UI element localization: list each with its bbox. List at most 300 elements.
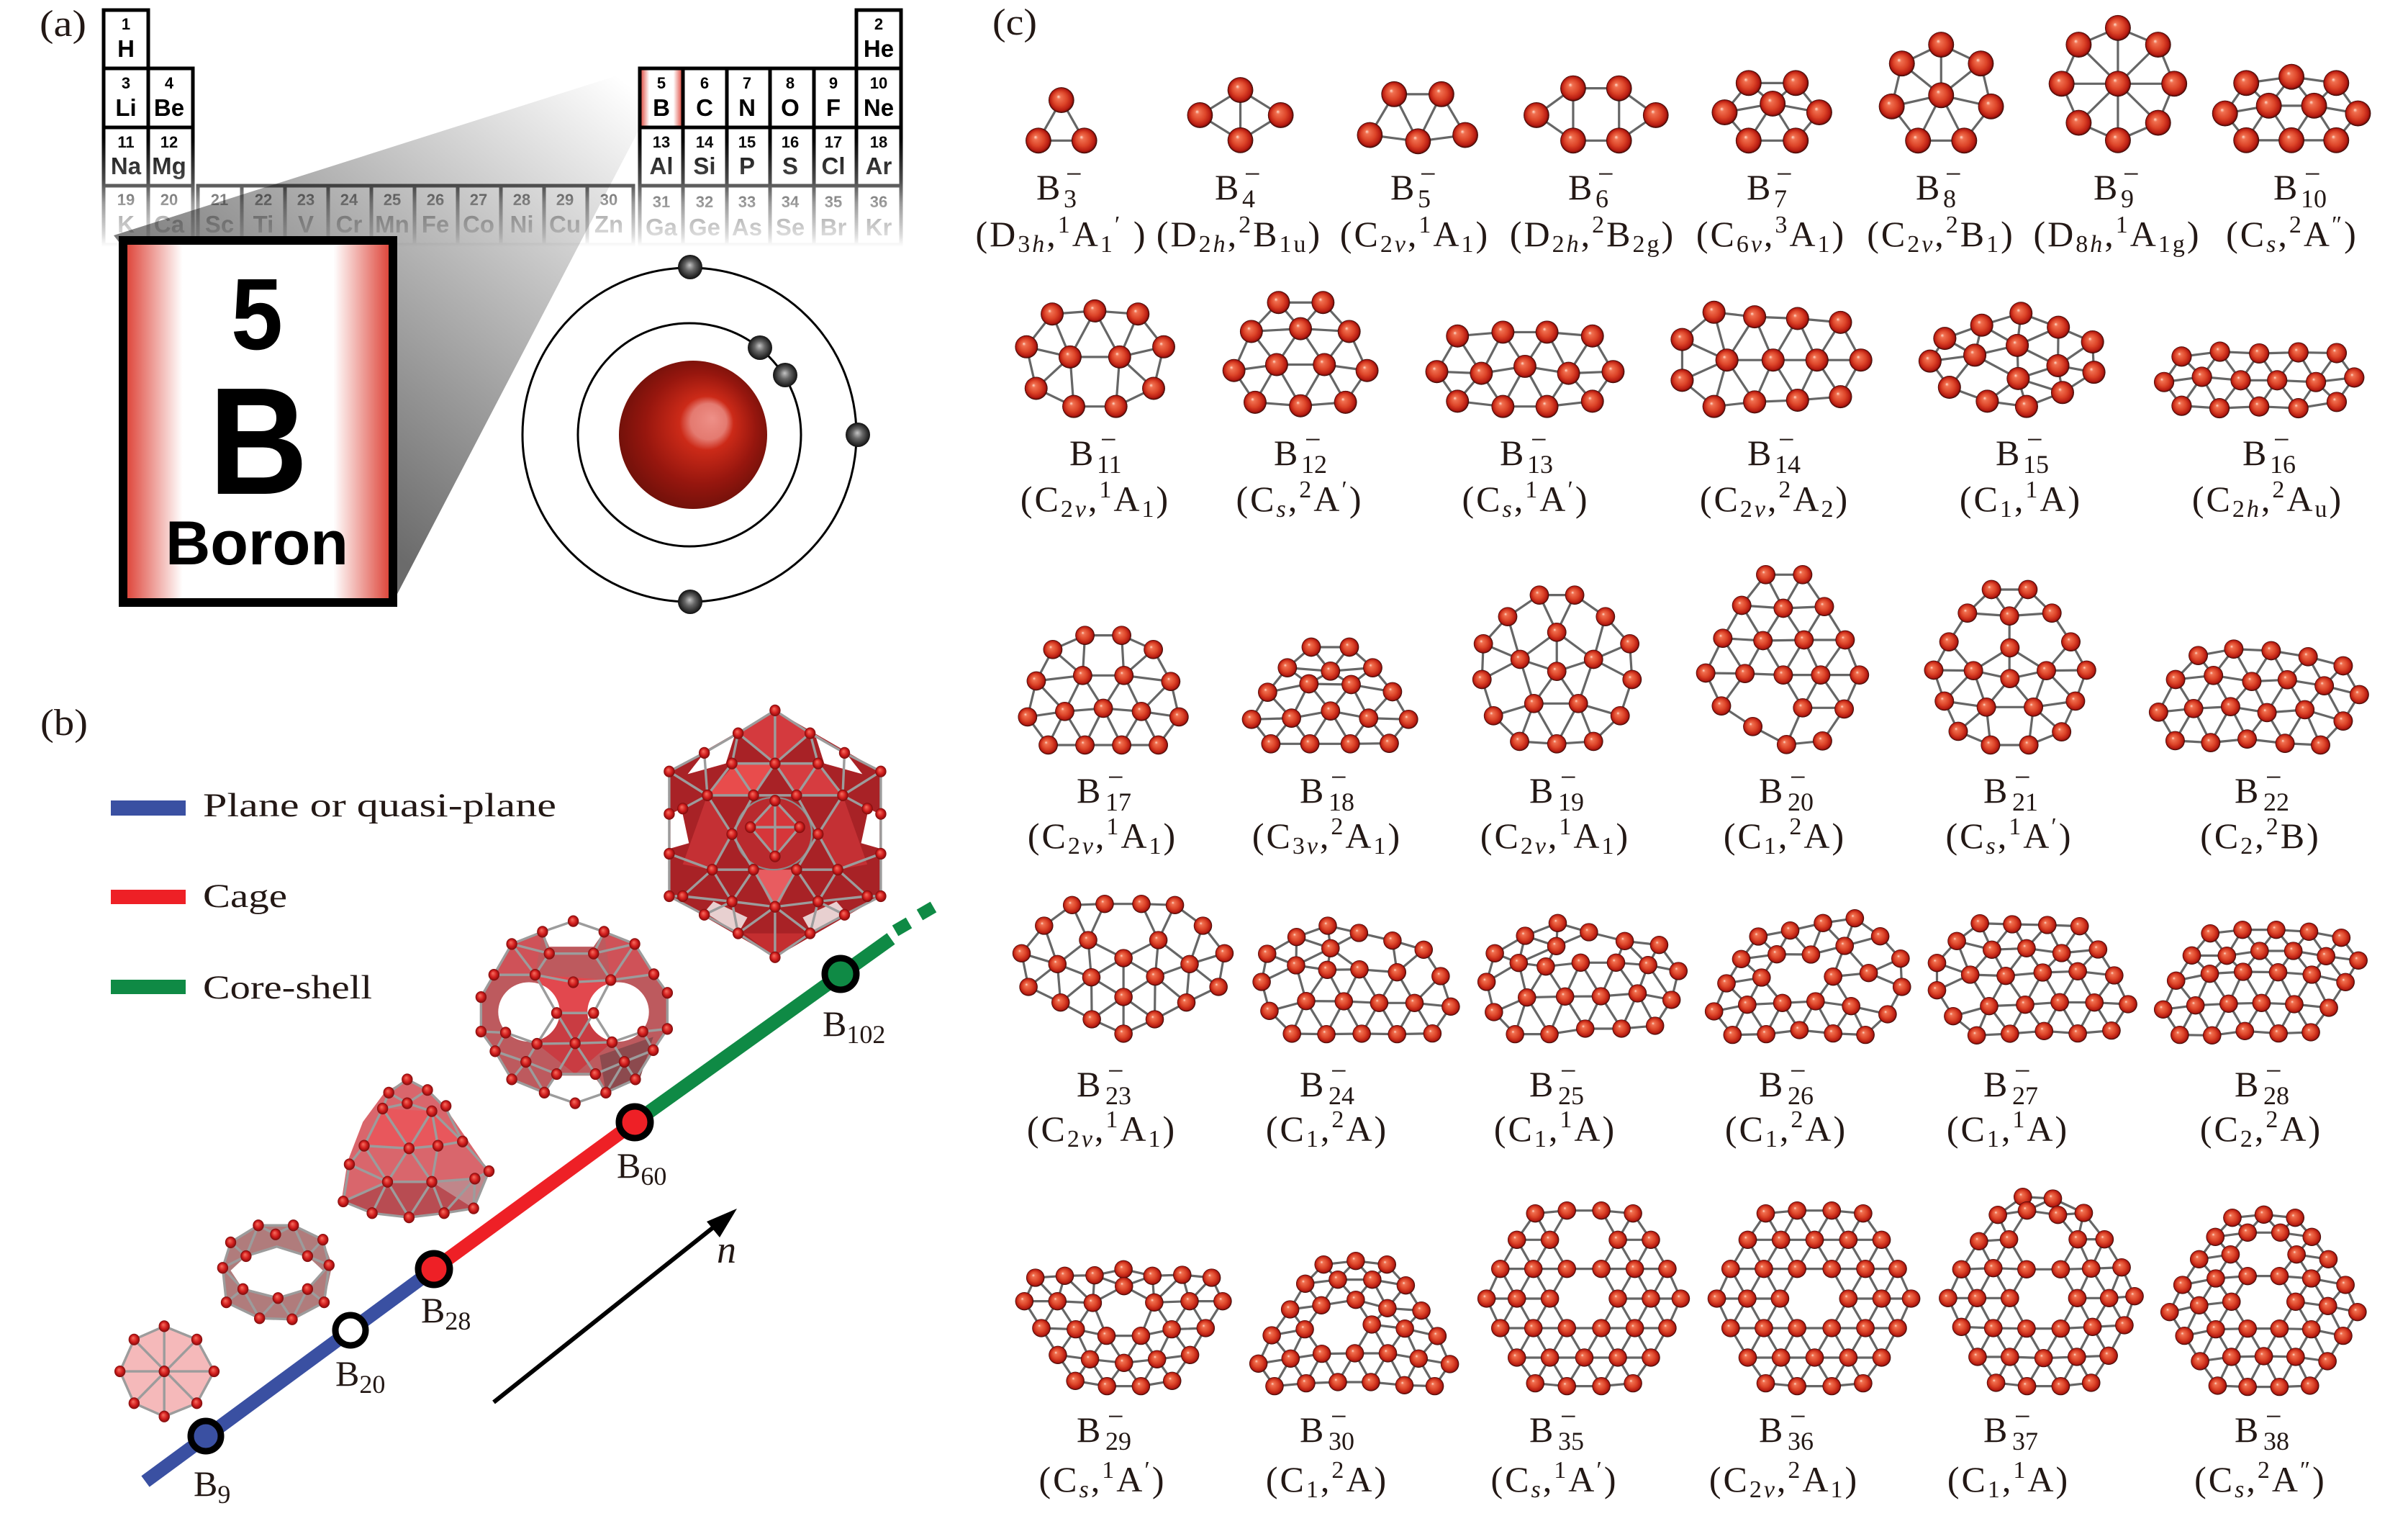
label B22: B <box>2235 770 2258 811</box>
label B25: (C1,1A) <box>1494 1106 1616 1152</box>
label B23: (C2v,1A1) <box>1027 1106 1177 1152</box>
label B16: (C2h,2Au) <box>2192 477 2343 523</box>
label B28: (C2,2A) <box>2200 1106 2322 1152</box>
label B7: − <box>1776 158 1793 190</box>
label B3: − <box>1066 158 1082 190</box>
label B37: (C1,1A) <box>1947 1457 2070 1503</box>
arrow n: n <box>717 1228 736 1271</box>
label B26: B <box>1759 1064 1783 1104</box>
boron atom model <box>522 255 870 614</box>
label B11 <box>1020 423 1170 523</box>
label B9: B <box>194 1463 217 1504</box>
cluster B24 <box>1262 926 1451 1034</box>
cluster B4 <box>1200 90 1281 140</box>
periodic table excerpt: Sc <box>205 211 234 238</box>
panel label c: (c) <box>992 2 1037 43</box>
periodic table excerpt: 23 <box>297 191 314 209</box>
label B28: B <box>2235 1064 2258 1104</box>
periodic table excerpt: 25 <box>384 191 401 209</box>
label B28: 28 <box>445 1307 471 1335</box>
label B38: (Cs,2A″) <box>2194 1457 2327 1503</box>
label B6: B <box>1568 167 1592 207</box>
label B26 <box>1725 1055 1847 1152</box>
label B10: 10 <box>2301 184 2327 213</box>
label B4: − <box>1244 158 1261 190</box>
periodic table excerpt: 7 <box>743 74 751 92</box>
label B19 <box>1480 761 1630 859</box>
marker B20 <box>335 1315 366 1345</box>
periodic table excerpt: 28 <box>513 191 530 209</box>
label B21: (Cs,1A′) <box>1946 813 2073 859</box>
label B6: − <box>1598 158 1614 190</box>
label B29: B <box>1077 1409 1100 1450</box>
label B29: − <box>1108 1400 1124 1432</box>
cluster B27 <box>1937 924 2128 1035</box>
label B36 <box>1709 1400 1859 1503</box>
periodic table excerpt: Ne <box>864 94 894 121</box>
label B30: B <box>1300 1409 1323 1450</box>
label B27: (C1,1A) <box>1947 1106 2069 1152</box>
periodic table excerpt: Cl <box>822 153 845 179</box>
label B4: B <box>1215 167 1239 207</box>
periodic table excerpt: 36 <box>870 193 887 211</box>
label B13: 13 <box>1527 450 1553 479</box>
label B5 <box>1340 158 1490 258</box>
cluster B19 <box>1482 595 1632 744</box>
cluster B22 <box>2158 649 2359 745</box>
label B16: 16 <box>2270 450 2296 479</box>
structure B9 plane <box>120 1326 214 1417</box>
label B5: (C2v,1A1) <box>1340 212 1490 258</box>
label B23 <box>1027 1055 1177 1152</box>
label B27: − <box>2014 1055 2031 1087</box>
label B14: (C2v,2A2) <box>1700 477 1850 523</box>
label B6: (D2h,2B2g) <box>1510 212 1675 258</box>
periodic table excerpt: Ca <box>154 211 185 238</box>
periodic table excerpt: 1 <box>122 15 130 33</box>
periodic table excerpt: Na <box>111 153 142 179</box>
label B21 <box>1946 761 2073 859</box>
periodic table excerpt: Fe <box>422 211 449 238</box>
label B3: (D3h,1A1′ ) <box>976 212 1147 258</box>
enlarged boron element box <box>123 240 393 603</box>
periodic table excerpt: Cr <box>336 211 362 238</box>
label B22: (C2,2B) <box>2200 813 2321 859</box>
label B13: (Cs,1A′) <box>1462 477 1589 523</box>
label B20: (C1,2A) <box>1724 813 1846 859</box>
label B37: B <box>1983 1409 2007 1450</box>
periodic table excerpt: F <box>826 94 841 121</box>
periodic table excerpt: 9 <box>829 74 838 92</box>
label B10: (Cs,2A″) <box>2226 212 2358 258</box>
periodic table excerpt: H <box>117 35 135 62</box>
row 5 clusters right <box>1717 1197 2358 1387</box>
periodic table excerpt: 33 <box>738 193 756 211</box>
periodic table excerpt: 15 <box>738 133 756 151</box>
cluster labels <box>976 158 2358 1503</box>
label B28: − <box>2266 1055 2282 1087</box>
label B18: (C3v,2A1) <box>1252 813 1402 859</box>
row 1 and 2 clusters right <box>1682 28 2358 408</box>
label B12 <box>1236 423 1363 523</box>
label B9: 9 <box>217 1480 230 1509</box>
row 3 clusters left <box>1028 595 1632 745</box>
label B27 <box>1947 1055 2069 1152</box>
panel a: periodic table and boron atom <box>40 4 905 614</box>
structure cage with holes <box>481 921 667 1104</box>
label B23: B <box>1077 1064 1100 1104</box>
periodic table excerpt: Cu <box>549 211 581 238</box>
periodic table excerpt: He <box>864 35 894 62</box>
periodic table excerpt: 18 <box>870 133 887 151</box>
periodic table excerpt: Br <box>820 214 846 240</box>
label B37: 37 <box>2012 1427 2038 1456</box>
label B24 <box>1266 1055 1388 1152</box>
legend: Plane or quasi-plane <box>203 787 556 824</box>
label B36: B <box>1759 1409 1783 1450</box>
label B27: 27 <box>2012 1081 2038 1110</box>
label B29: 29 <box>1105 1427 1131 1456</box>
label B20: B <box>1759 770 1783 811</box>
label B30 <box>1266 1400 1388 1503</box>
label B9: B <box>2094 167 2117 207</box>
label B3: B <box>1036 167 1060 207</box>
label B16: B <box>2242 433 2266 473</box>
periodic table excerpt: Al <box>649 153 674 179</box>
label B18: 18 <box>1329 788 1354 816</box>
periodic table excerpt: Ti <box>253 211 273 238</box>
periodic table excerpt: 35 <box>825 193 842 211</box>
label B60: 60 <box>641 1162 666 1191</box>
label B27: B <box>1983 1064 2007 1104</box>
label B3 <box>976 158 1147 258</box>
label B13: − <box>1531 423 1547 456</box>
label B4 <box>1157 158 1322 258</box>
label B17: − <box>1108 761 1124 793</box>
label B17 <box>1028 761 1177 859</box>
label B29 <box>1039 1400 1166 1503</box>
periodic table excerpt: 30 <box>600 191 617 209</box>
periodic table excerpt: Ni <box>510 211 534 238</box>
cluster B18 <box>1251 647 1408 744</box>
label B21: 21 <box>2012 788 2038 816</box>
label B19: (C2v,1A1) <box>1480 813 1630 859</box>
periodic table excerpt <box>99 10 905 247</box>
cluster B15 <box>1930 313 2094 407</box>
row 1 clusters left <box>1026 89 1656 407</box>
label B38: B <box>2235 1409 2258 1450</box>
periodic table excerpt: 19 <box>117 191 135 209</box>
periodic table excerpt: V <box>298 211 314 238</box>
cluster B5 <box>1370 94 1465 141</box>
cluster B21 <box>1934 590 2086 745</box>
cluster B28 <box>2163 930 2358 1035</box>
label B36: (C2v,2A1) <box>1709 1457 1859 1503</box>
label B8: B <box>1916 167 1939 207</box>
periodic table excerpt: 31 <box>653 193 670 211</box>
legend <box>111 787 556 1006</box>
cluster B12 <box>1234 302 1367 406</box>
label B24: B <box>1300 1064 1323 1104</box>
label B26: − <box>1790 1055 1806 1087</box>
periodic table excerpt: Co <box>463 211 494 238</box>
periodic table excerpt: 26 <box>427 191 444 209</box>
arrow n <box>494 1209 737 1402</box>
label B19: B <box>1529 770 1553 811</box>
label B38: − <box>2266 1400 2282 1432</box>
label B30: (C1,2A) <box>1266 1457 1388 1503</box>
label B11: (C2v,1A1) <box>1020 477 1170 523</box>
label B18: B <box>1300 770 1323 811</box>
marker B28 <box>418 1253 450 1285</box>
cluster B35 <box>1487 1211 1680 1386</box>
label B37: − <box>2014 1400 2031 1432</box>
label B28: 28 <box>2263 1081 2289 1110</box>
label B26: (C1,2A) <box>1725 1106 1847 1152</box>
periodic table excerpt: Si <box>693 153 716 179</box>
periodic table excerpt: Ga <box>646 214 678 240</box>
cluster B20 <box>1706 574 1860 744</box>
structure cone <box>341 1079 489 1217</box>
label B35: − <box>1560 1400 1577 1432</box>
cluster B6 <box>1536 89 1656 140</box>
periodic table excerpt: Be <box>154 94 184 121</box>
periodic table excerpt: 14 <box>696 133 714 151</box>
cluster B13 <box>1437 332 1613 407</box>
periodic table excerpt: 21 <box>211 191 228 209</box>
legend: Cage <box>203 877 287 915</box>
label B19: − <box>1560 761 1577 793</box>
label B15: B <box>1996 433 2019 473</box>
label B35: (Cs,1A′) <box>1491 1457 1618 1503</box>
cluster B9 <box>2062 28 2174 140</box>
label B3: 3 <box>1064 184 1077 213</box>
label B15: (C1,1A) <box>1960 477 2082 523</box>
periodic table excerpt: 13 <box>653 133 670 151</box>
periodic table excerpt: 11 <box>117 133 135 151</box>
label B11: − <box>1100 423 1117 456</box>
label B25 <box>1494 1055 1616 1152</box>
label B28: B <box>421 1290 445 1330</box>
label B22 <box>2200 761 2321 859</box>
periodic table excerpt: O <box>781 94 800 121</box>
structure core-shell <box>669 710 881 957</box>
3D cluster structures <box>120 710 881 1417</box>
label B7: 7 <box>1774 184 1787 213</box>
cluster B38 <box>2170 1214 2358 1387</box>
cluster B29 <box>1024 1269 1223 1386</box>
label B6 <box>1510 158 1675 258</box>
label B15 <box>1960 423 2082 523</box>
label B20: B <box>335 1353 359 1394</box>
label B36: 36 <box>1788 1427 1814 1456</box>
periodic table excerpt: P <box>739 153 755 179</box>
periodic table excerpt: Mg <box>152 153 186 179</box>
label B38: 38 <box>2263 1427 2289 1456</box>
periodic table excerpt: 3 <box>122 74 130 92</box>
size axis line <box>145 907 933 1481</box>
label B8: (C2v,2B1) <box>1867 212 2015 258</box>
label B14: − <box>1778 423 1795 456</box>
periodic table excerpt: 17 <box>825 133 842 151</box>
label B22: − <box>2266 761 2282 793</box>
label B9: − <box>2123 158 2140 190</box>
label B60: B <box>617 1145 641 1186</box>
periodic table excerpt: Zn <box>594 211 623 238</box>
cluster B37 <box>1948 1197 2135 1386</box>
periodic table excerpt: 34 <box>782 193 800 211</box>
label B8 <box>1867 158 2015 258</box>
label B38 <box>2194 1400 2327 1503</box>
label B8: − <box>1945 158 1962 190</box>
label B102: B <box>823 1003 846 1044</box>
periodic table excerpt: 10 <box>870 74 887 92</box>
highlighted boron cell <box>640 68 683 127</box>
label B17: 17 <box>1105 788 1131 816</box>
cluster B14 <box>1682 312 1861 407</box>
periodic table excerpt: N <box>738 94 756 121</box>
label B18: − <box>1331 761 1347 793</box>
label B14: 14 <box>1775 450 1801 479</box>
label B10: − <box>2304 158 2321 190</box>
periodic table excerpt: Se <box>776 214 805 240</box>
periodic table excerpt: S <box>782 153 798 179</box>
periodic table excerpt: Mn <box>375 211 409 238</box>
cluster B30 <box>1259 1261 1450 1386</box>
periodic table excerpt: Kr <box>866 214 892 240</box>
periodic table excerpt: K <box>117 211 135 238</box>
periodic table excerpt: 27 <box>470 191 487 209</box>
label B18 <box>1252 761 1402 859</box>
periodic table excerpt: 6 <box>700 74 709 92</box>
label B10 <box>2226 158 2358 258</box>
cluster B11 <box>1026 311 1164 407</box>
label B20: − <box>1790 761 1806 793</box>
label B12: 12 <box>1301 450 1327 479</box>
label B7: (C6v,3A1) <box>1696 212 1846 258</box>
periodic table excerpt: 5 <box>657 74 666 92</box>
cluster B36 <box>1717 1211 1911 1386</box>
periodic table excerpt: C <box>696 94 713 121</box>
label B20: 20 <box>1788 788 1814 816</box>
marker B102 <box>825 958 856 990</box>
periodic table excerpt: 4 <box>165 74 174 92</box>
row 3 clusters right <box>1706 574 2359 745</box>
label B8: 8 <box>1943 184 1956 213</box>
periodic table excerpt: 24 <box>340 191 358 209</box>
label B25: B <box>1529 1064 1553 1104</box>
label B5: − <box>1420 158 1436 190</box>
cluster B8 <box>1892 45 1991 140</box>
label B24: 24 <box>1329 1081 1354 1110</box>
label B9: (D8h,1A1g) <box>2033 212 2201 258</box>
label B23: 23 <box>1105 1081 1131 1110</box>
label B13: B <box>1500 433 1524 473</box>
label B12: (Cs,2A′) <box>1236 477 1363 523</box>
label B6: 6 <box>1595 184 1608 213</box>
periodic table excerpt: 20 <box>160 191 178 209</box>
label B24: − <box>1331 1055 1347 1087</box>
label B36: − <box>1790 1400 1806 1432</box>
label B11: 11 <box>1097 450 1122 479</box>
periodic table excerpt: As <box>732 214 762 240</box>
label B35: 35 <box>1558 1427 1584 1456</box>
label B23: − <box>1108 1055 1124 1087</box>
structure B20 ring <box>222 1225 332 1319</box>
label B26: 26 <box>1788 1081 1814 1110</box>
label B21: − <box>2014 761 2031 793</box>
label B20: 20 <box>359 1370 385 1399</box>
label B25: 25 <box>1558 1081 1584 1110</box>
enlarged boron element box: Boron <box>166 509 348 578</box>
panel label a: (a) <box>40 4 86 45</box>
enlarged boron element box: 5 <box>231 257 283 371</box>
label B12: B <box>1274 433 1298 473</box>
label B102: 102 <box>846 1020 885 1049</box>
label B5: 5 <box>1418 184 1431 213</box>
panel c: cluster catalog <box>976 2 2359 1503</box>
periodic table excerpt: Ar <box>866 153 892 179</box>
periodic table excerpt: 32 <box>696 193 713 211</box>
periodic table excerpt: 2 <box>874 15 883 33</box>
row 5 clusters left <box>1024 1211 1680 1386</box>
label B9 <box>2033 158 2201 258</box>
label B20 <box>1724 761 1846 859</box>
legend: Core-shell <box>203 969 372 1006</box>
label B21: B <box>1983 770 2007 811</box>
label B35: B <box>1529 1409 1553 1450</box>
label B30: 30 <box>1329 1427 1354 1456</box>
label B5: B <box>1390 167 1414 207</box>
periodic table excerpt: 8 <box>786 74 795 92</box>
label B30: − <box>1331 1400 1347 1432</box>
label B10: B <box>2273 167 2297 207</box>
label B11: B <box>1069 433 1093 473</box>
marker B9 <box>191 1421 221 1451</box>
label B14 <box>1700 423 1850 523</box>
label B7: B <box>1747 167 1770 207</box>
label B25: − <box>1560 1055 1577 1087</box>
cluster B17 <box>1028 636 1179 745</box>
label B4: 4 <box>1242 184 1255 213</box>
periodic table excerpt: 16 <box>782 133 799 151</box>
label B14: B <box>1747 433 1771 473</box>
label B15: 15 <box>2023 450 2049 479</box>
label B29: (Cs,1A′) <box>1039 1457 1166 1503</box>
label B15: − <box>2027 423 2043 456</box>
cluster B10 <box>2225 77 2358 140</box>
marker B60 <box>619 1106 651 1138</box>
cluster B3 <box>1038 100 1085 140</box>
label B24: (C1,2A) <box>1266 1106 1388 1152</box>
label B28 <box>2200 1055 2322 1152</box>
label B17: (C2v,1A1) <box>1028 813 1177 859</box>
panel label b: (b) <box>40 703 88 744</box>
cluster B23 <box>1022 904 1224 1034</box>
panel b: growth pathway <box>40 703 933 1509</box>
enlarged boron element box: B <box>209 356 308 526</box>
row 4 clusters left <box>1022 904 1678 1034</box>
label B22: 22 <box>2263 788 2289 816</box>
label B37 <box>1947 1400 2070 1503</box>
label B17: B <box>1077 770 1100 811</box>
cluster B25 <box>1487 923 1678 1034</box>
label B16 <box>2192 423 2343 523</box>
label B9: 9 <box>2121 184 2134 213</box>
label B4: (D2h,2B1u) <box>1157 212 1322 258</box>
row 4 clusters right <box>1714 919 2358 1035</box>
periodic table excerpt: 22 <box>255 191 272 209</box>
